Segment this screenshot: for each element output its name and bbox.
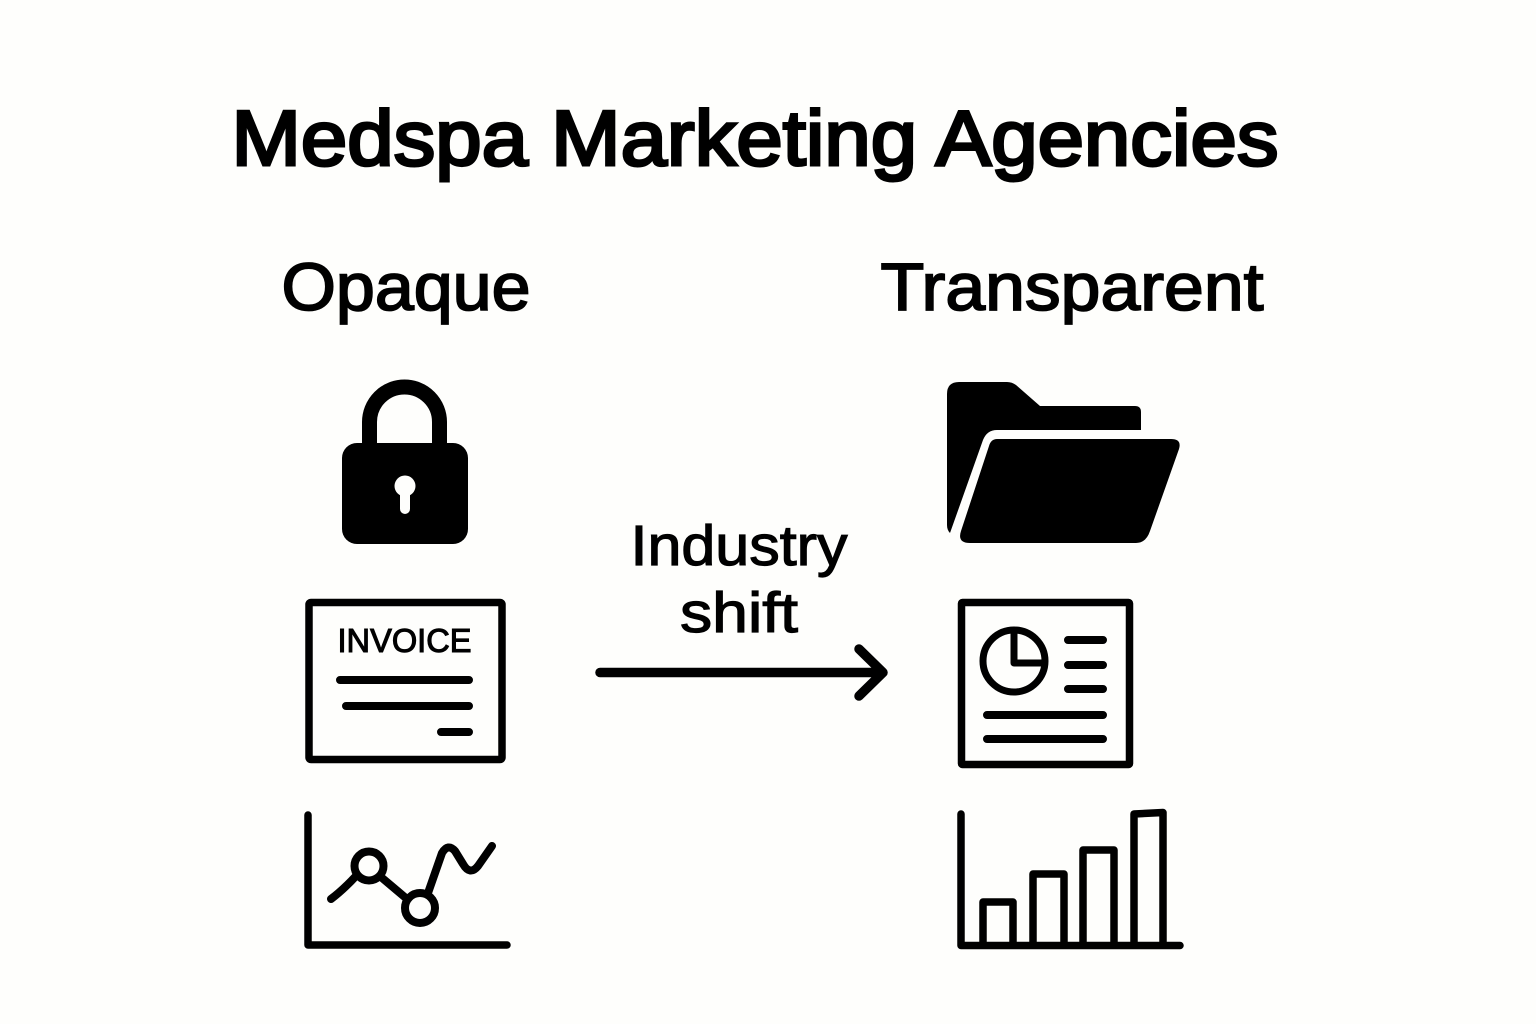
icon: invoice	[309, 602, 502, 760]
icon: folder	[947, 382, 1180, 543]
icon: padlock	[342, 387, 468, 544]
invoice label: INVOICE	[338, 623, 472, 660]
report lines	[987, 640, 1103, 739]
heading: Opaque: Opaque	[282, 250, 530, 325]
title: Medspa Marketing Agencies	[232, 94, 1278, 182]
icon: report with pie chart	[962, 602, 1130, 764]
label: Industry shift: shift	[680, 581, 798, 645]
invoice lines	[340, 680, 469, 732]
icon: bar chart	[961, 812, 1180, 946]
pie chart	[983, 630, 1045, 692]
label: Industry shift: Industry	[630, 514, 848, 578]
label: Industry shift	[630, 514, 848, 645]
arrow	[600, 649, 883, 696]
heading: Transparent: Transparent	[880, 250, 1264, 325]
icon: unclear line chart	[308, 815, 507, 945]
